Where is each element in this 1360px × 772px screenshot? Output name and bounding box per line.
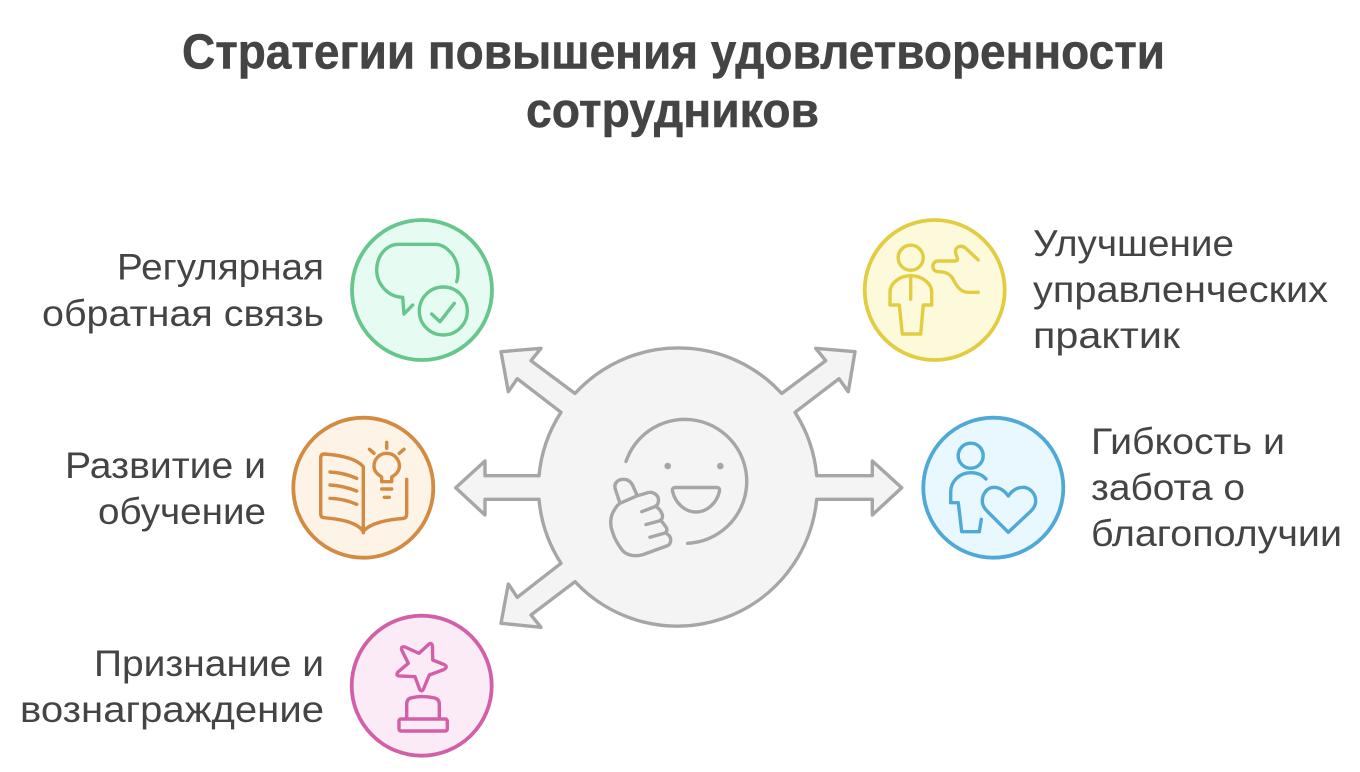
label (20, 642, 324, 730)
icon: smiley with thumbs up (611, 419, 747, 556)
label: вознаграждение (20, 688, 324, 730)
panel: development and training (65, 418, 433, 558)
title: Стратегии повышения удовлетворенности (182, 26, 1165, 80)
icon: star trophy (352, 616, 492, 756)
title: сотрудников (526, 84, 819, 138)
icon: manager with path (865, 220, 1005, 360)
label (42, 246, 324, 334)
label: обучение (98, 490, 266, 532)
panel: improving management practices (865, 220, 1328, 360)
label: Гибкость и (1091, 420, 1285, 462)
panel: regular feedback (42, 220, 492, 360)
label: забота о (1091, 466, 1245, 508)
label: Признание и (94, 642, 324, 684)
title (182, 26, 1165, 138)
label: обратная связь (42, 292, 324, 334)
label (1033, 222, 1328, 356)
icon: person with heart (923, 418, 1063, 558)
label: управленческих (1033, 268, 1328, 310)
label: Регулярная (117, 246, 324, 288)
label: Развитие и (65, 444, 266, 486)
central circle with five arrows (456, 348, 902, 627)
label (65, 444, 266, 532)
icon: open book with light bulb (293, 418, 433, 558)
label: практик (1033, 314, 1181, 356)
label: благополучии (1091, 512, 1342, 554)
label: Улучшение (1033, 222, 1234, 264)
panel: recognition and reward (20, 616, 492, 756)
panel: flexibility and wellbeing (923, 418, 1342, 558)
icon: speech bubble with check (352, 220, 492, 360)
label (1091, 420, 1342, 554)
